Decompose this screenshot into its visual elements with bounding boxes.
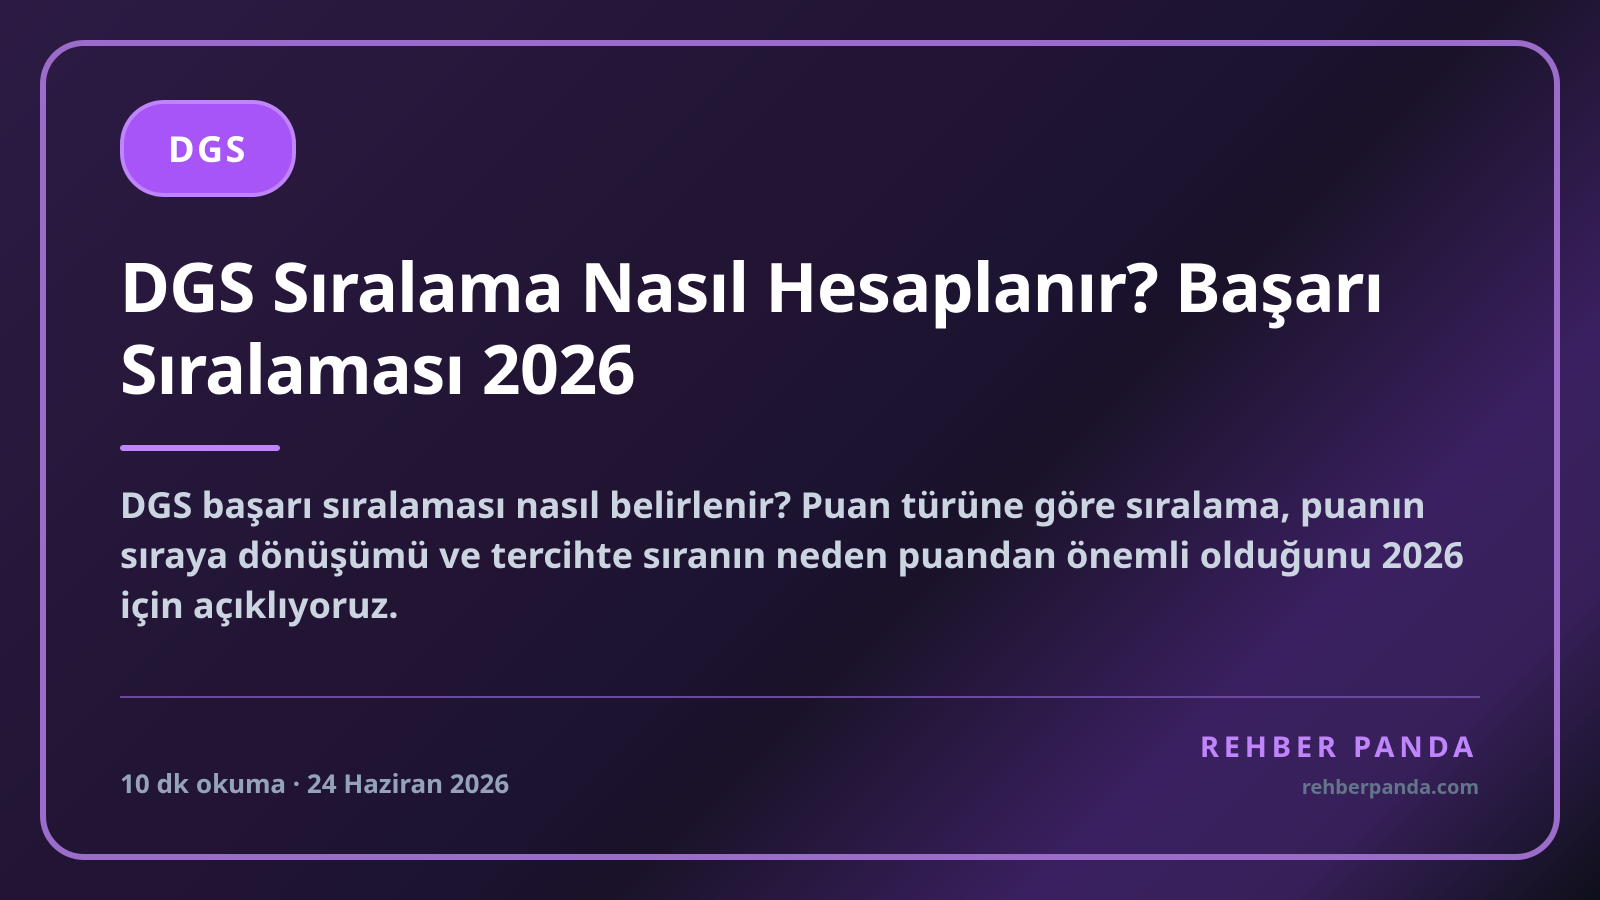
title: Sıralaması 2026	[120, 321, 635, 414]
meta: reading time and date: 10 dk okuma · 24 Haziran 2026	[120, 765, 509, 801]
title: DGS Sıralama Nasıl Hesaplanır? Başarı	[120, 239, 1384, 332]
description: için açıklıyoruz.	[120, 580, 399, 629]
badge: DGS	[120, 100, 296, 197]
accent bar	[120, 445, 280, 451]
badge: DGS: DGS	[168, 124, 248, 173]
brand name: REHBER PANDA	[1200, 727, 1478, 766]
footer divider	[120, 696, 1480, 698]
description: DGS başarı sıralaması nasıl belirlenir? Puan türüne göre sıralama, puanın	[120, 480, 1426, 529]
title	[120, 239, 1384, 414]
description	[120, 480, 1464, 629]
description: sıraya dönüşümü ve tercihte sıranın neden puandan önemli olduğunu 2026	[120, 530, 1464, 579]
brand url: rehberpanda.com	[1302, 773, 1479, 800]
